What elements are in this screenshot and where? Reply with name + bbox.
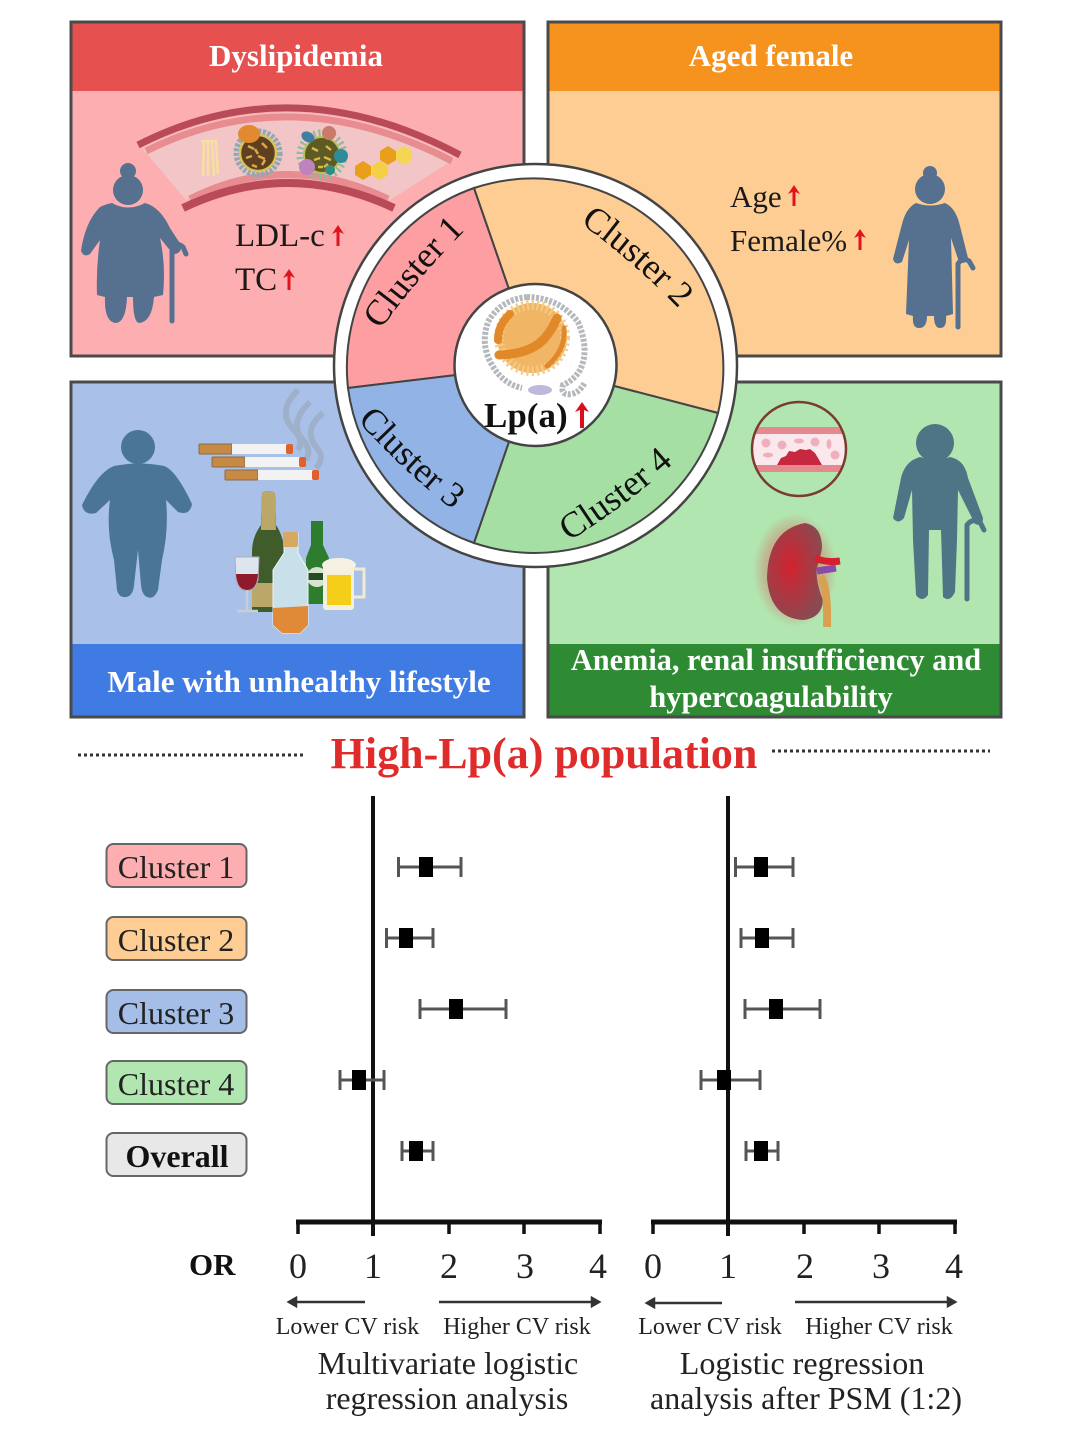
chart: logistic regression after PSM forest plot: 1 [719, 1246, 737, 1286]
chart: logistic regression after PSM forest plot [638, 796, 963, 1416]
text: LDL-c and TC raised [235, 218, 344, 298]
chart: multivariate logistic forest plot: Higher CV risk [443, 1314, 591, 1340]
footer: anemia renal insufficiency hypercoagulability [548, 643, 1001, 717]
icon: artery with lipoproteins [138, 108, 460, 208]
chart: multivariate logistic forest plot: Lower CV risk [276, 1314, 419, 1340]
text: LDL-c and TC raised: TC [235, 262, 277, 298]
pill: cluster 4 [106, 1061, 246, 1104]
pill: cluster 1: Cluster 1 [118, 849, 234, 885]
chart: logistic regression after PSM forest plot: 3 [872, 1246, 890, 1286]
panel: male with unhealthy lifestyle [71, 382, 524, 717]
icon: Lp(a) lipoprotein [485, 297, 585, 395]
segment: cluster 2: Cluster 2 [585, 208, 692, 308]
text: age and female raised: Age [730, 179, 782, 214]
chart: multivariate logistic forest plot: 3 [516, 1246, 534, 1286]
center: Lp(a) particle [454, 284, 616, 446]
segment: cluster 3 [346, 374, 508, 544]
chart: logistic regression after PSM forest plot: Lower CV risk [638, 1314, 782, 1340]
pill: overall [106, 1133, 246, 1176]
icon: obese aged female [81, 163, 186, 323]
chart: logistic regression after PSM forest plot: analysis after PSM (1:2) [650, 1380, 962, 1416]
pill: cluster 4: Cluster 4 [118, 1066, 234, 1102]
segment: cluster 4 [472, 385, 720, 554]
pill: cluster 3: Cluster 3 [118, 995, 234, 1031]
text: age and female raised: Female% [730, 223, 847, 258]
header: dyslipidemia [71, 22, 524, 91]
icon: blood vessel with clot [750, 402, 848, 496]
chart: logistic regression after PSM forest plot: Higher CV risk [805, 1314, 953, 1340]
icon: aged person with cane [893, 424, 984, 599]
pill: cluster 1 [106, 844, 246, 887]
segment: cluster 2 [472, 177, 724, 414]
segment: cluster 1 [346, 186, 508, 390]
segment: cluster 1: Cluster 1 [366, 218, 464, 325]
text: age and female raised [730, 179, 866, 258]
footer: anemia renal insufficiency hypercoagulability: hypercoagulability [649, 680, 893, 714]
panel: aged female [548, 22, 1001, 356]
header: aged female [548, 22, 1001, 91]
axis label: OR: OR [189, 1247, 236, 1282]
chart: multivariate logistic forest plot: 0 [289, 1246, 307, 1286]
legend: cluster pills [106, 844, 246, 1176]
chart: multivariate logistic forest plot: regression analysis [326, 1380, 568, 1416]
icon: aged female with cane [893, 166, 973, 328]
chart: logistic regression after PSM forest plot: 2 [796, 1246, 814, 1286]
pill: cluster 3 [106, 990, 246, 1033]
chart: multivariate logistic forest plot: Multivariate logistic [318, 1345, 578, 1381]
chart: multivariate logistic forest plot: 1 [364, 1246, 382, 1286]
chart: multivariate logistic forest plot: 4 [589, 1246, 607, 1286]
footer: anemia renal insufficiency hypercoagulability: Anemia, renal insufficiency and [571, 643, 981, 677]
chart: multivariate logistic forest plot: 2 [440, 1246, 458, 1286]
chart: multivariate logistic forest plot [276, 796, 607, 1416]
icon: alcohol bottles and glasses [235, 491, 364, 633]
segment: cluster 4: Cluster 4 [561, 448, 671, 537]
footer: male with unhealthy lifestyle [71, 644, 524, 717]
wheel: four clusters around Lp(a) [332, 162, 738, 568]
icon: overweight male [82, 430, 192, 598]
icon: cigarettes with smoke [199, 390, 323, 480]
header: dyslipidemia: Dyslipidemia [209, 38, 383, 73]
chart: logistic regression after PSM forest plot: 4 [945, 1246, 963, 1286]
text: LDL-c and TC raised: LDL-c [235, 218, 325, 254]
title: High-Lp(a) population: High-Lp(a) population [331, 729, 757, 778]
icon: damaged kidney [753, 513, 840, 627]
panel: anemia renal insufficiency hypercoagulability [548, 382, 1001, 717]
label: Lp(a) raised: Lp(a) [484, 396, 568, 435]
pill: overall: Overall [125, 1138, 229, 1174]
chart: logistic regression after PSM forest plot: 0 [644, 1246, 662, 1286]
chart: logistic regression after PSM forest plot: Logistic regression [680, 1345, 924, 1381]
panel: dyslipidemia [71, 22, 524, 356]
pill: cluster 2 [106, 917, 246, 960]
pill: cluster 2: Cluster 2 [118, 922, 234, 958]
segment: cluster 3: Cluster 3 [362, 410, 464, 506]
header: aged female: Aged female [689, 38, 853, 73]
footer: male with unhealthy lifestyle: Male with unhealthy lifestyle [107, 664, 491, 699]
